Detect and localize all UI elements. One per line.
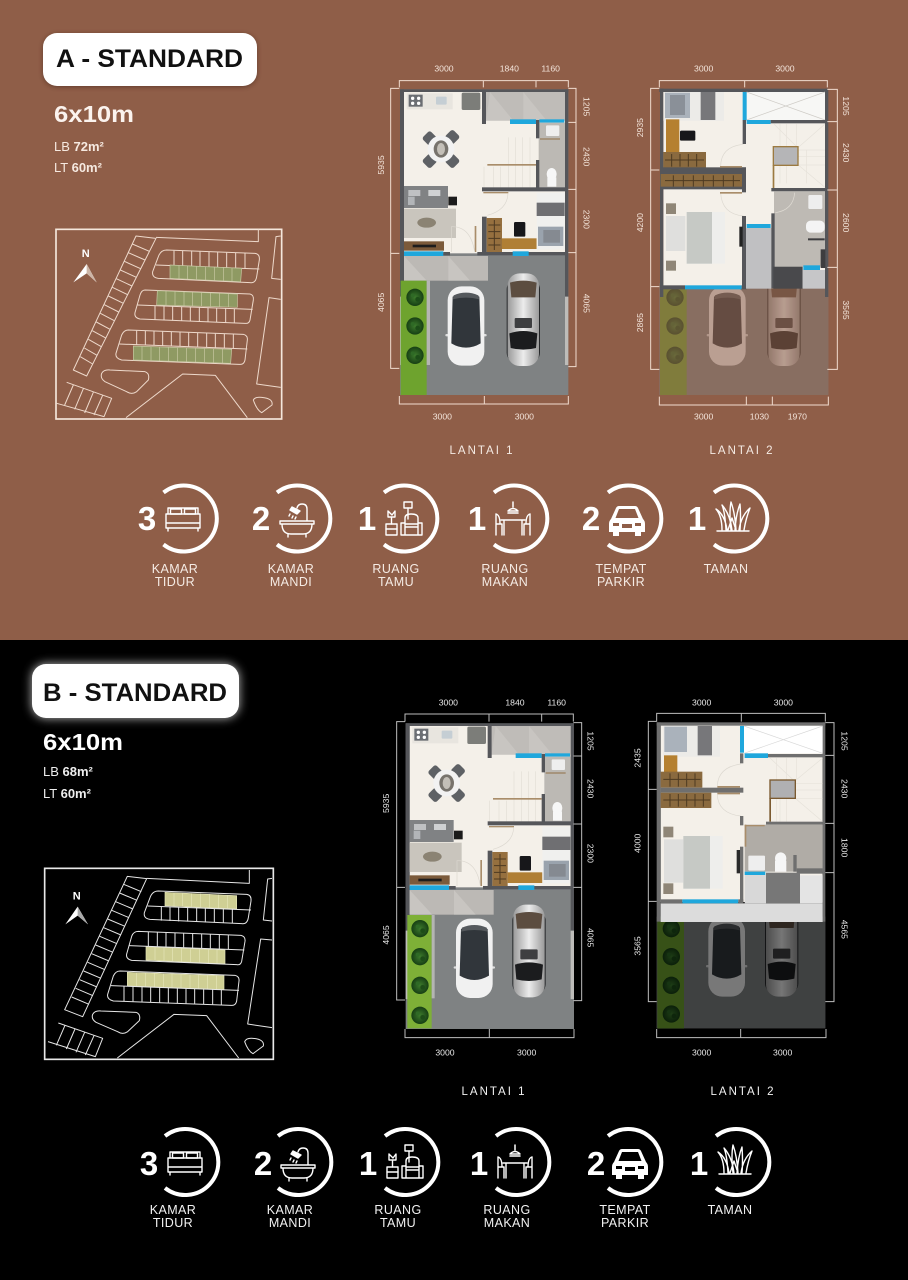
dimensions A2: 3000 — [694, 64, 713, 74]
feature: ruang tamu A: RUANG — [372, 562, 420, 576]
feature: kamar mandi A: MANDI — [270, 575, 312, 589]
feature: ruang makan A — [468, 486, 547, 589]
site plan A — [56, 229, 282, 419]
feature: taman A — [688, 486, 767, 576]
dimensions A2: 1970 — [788, 412, 807, 422]
site plan B — [45, 868, 273, 1059]
dimensions B1: 3000 — [435, 1047, 455, 1057]
dimensions A2: 3565 — [841, 300, 851, 320]
site plan A: N — [82, 248, 90, 260]
dimensions B1: 1840 — [505, 698, 525, 708]
LB text B: LB 68m² — [43, 764, 94, 779]
LT text B: LT 60m² — [43, 786, 92, 801]
dimensions B1: 1160 — [547, 698, 566, 708]
building A2 — [659, 89, 828, 297]
dimensions B1: 3000 — [439, 698, 458, 708]
background: section A — [0, 0, 908, 640]
dimensions A2: 1205 — [841, 96, 851, 116]
dimensions B2: 1800 — [840, 838, 850, 857]
dimensions A2: 4200 — [635, 213, 645, 232]
feature: ruang makan A: 1 — [468, 500, 486, 537]
dimensions A1: 5935 — [376, 155, 386, 175]
caption: lantai 2 A: LANTAI 2 — [710, 445, 774, 457]
dimensions B1: 3000 — [517, 1047, 536, 1057]
heading pill: A - STANDARD: A - STANDARD — [56, 45, 243, 73]
feature: kamar mandi A: KAMAR — [268, 562, 314, 576]
dimensions A1: 4065 — [582, 294, 592, 313]
site plan B: N — [73, 890, 81, 902]
dimensions B2: 1205 — [840, 731, 850, 751]
feature: ruang tamu B: TAMU — [380, 1216, 416, 1230]
feature: kamar mandi A — [252, 486, 330, 589]
size text B: 6x10m — [43, 729, 123, 755]
feature: taman B: 1 — [690, 1145, 708, 1182]
feature: taman A: 1 — [688, 500, 706, 537]
dimensions A1: 2300 — [582, 210, 592, 229]
feature: tempat parkir B — [587, 1129, 661, 1230]
feature: kamar mandi B: KAMAR — [267, 1203, 313, 1217]
dimensions A2: 1030 — [750, 412, 769, 422]
dimensions B2: 2435 — [632, 748, 642, 768]
feature: tempat parkir A — [582, 486, 661, 589]
feature: ruang makan A: RUANG — [481, 562, 529, 576]
feature: taman B — [690, 1129, 769, 1217]
feature: kamar mandi B: 2 — [254, 1145, 272, 1182]
dimensions B1: 2300 — [586, 844, 596, 863]
dimensions B2: 4565 — [840, 920, 850, 939]
feature: kamar tidur A — [138, 486, 217, 589]
dimensions B2: 4000 — [632, 834, 642, 853]
floor plan A lantai 1 — [376, 64, 592, 422]
feature: ruang makan A: MAKAN — [482, 575, 528, 589]
cars B1 — [454, 905, 546, 998]
feature: kamar mandi A: 2 — [252, 500, 270, 537]
floor plan A lantai 2 — [635, 64, 851, 422]
garden B1 — [407, 915, 435, 1028]
dimensions B2 — [632, 698, 850, 1057]
garden A1 — [401, 281, 430, 395]
dimensions A2: 3000 — [775, 64, 795, 74]
feature: tempat parkir B: PARKIR — [601, 1216, 649, 1230]
dimensions A2: 2935 — [635, 118, 645, 137]
feature: ruang makan B: MAKAN — [484, 1216, 530, 1230]
cars A1 — [445, 273, 540, 366]
feature: tempat parkir A: 2 — [582, 500, 600, 537]
feature: kamar mandi B — [254, 1129, 331, 1230]
dimensions A1: 3000 — [434, 64, 454, 74]
dimensions A2: 2865 — [635, 313, 645, 332]
dimensions B2: 3000 — [773, 1047, 792, 1057]
feature: kamar tidur A: 3 — [138, 500, 156, 537]
feature: taman A: TAMAN — [704, 562, 748, 576]
feature: tempat parkir B: TEMPAT — [599, 1203, 651, 1217]
heading pill: B - STANDARD: B - STANDARD — [43, 679, 227, 707]
dimensions B1: 2430 — [586, 779, 596, 798]
feature: tempat parkir A: PARKIR — [597, 575, 645, 589]
LB text A: LB 72m² — [54, 139, 105, 154]
feature: ruang tamu B — [359, 1129, 438, 1230]
feature: ruang tamu B: RUANG — [374, 1203, 422, 1217]
heading pill: A - STANDARD — [43, 33, 257, 87]
caption: lantai 2 B: LANTAI 2 — [710, 1086, 776, 1098]
dimensions A1: 1160 — [541, 64, 560, 74]
dimensions B1: 1205 — [586, 731, 596, 751]
LT text A: LT 60m² — [54, 160, 103, 175]
feature: ruang tamu A — [358, 486, 437, 589]
dimensions A2: 3000 — [694, 412, 713, 422]
dimensions B1: 4065 — [586, 928, 596, 947]
dimensions B2: 3565 — [632, 936, 642, 956]
feature: ruang makan B — [470, 1129, 549, 1230]
feature: ruang tamu A: TAMU — [378, 575, 414, 589]
caption: lantai 1 B: LANTAI 1 — [462, 1086, 526, 1098]
feature: taman B: TAMAN — [708, 1203, 752, 1217]
dimensions A1: 1840 — [500, 64, 519, 74]
feature: kamar mandi B: MANDI — [269, 1216, 311, 1230]
feature: kamar tidur B — [140, 1129, 218, 1230]
dimensions A1: 3000 — [515, 412, 534, 422]
feature: tempat parkir A: TEMPAT — [595, 562, 647, 576]
dimensions A2: 2600 — [841, 213, 851, 232]
dimensions B2: 3000 — [692, 1047, 711, 1057]
feature: ruang makan B: RUANG — [483, 1203, 531, 1217]
dimensions A1 — [376, 64, 592, 422]
feature: kamar tidur A: TIDUR — [155, 575, 195, 589]
feature: kamar tidur B: 3 — [140, 1145, 158, 1182]
dimensions B1 — [381, 698, 596, 1057]
caption: lantai 1 A: LANTAI 1 — [450, 445, 514, 457]
heading pill: B - STANDARD — [32, 664, 239, 718]
building B2 — [657, 722, 825, 922]
dimensions A1: 3000 — [433, 412, 452, 422]
dimensions B1: 5935 — [381, 794, 391, 813]
dimensions B1: 4065 — [381, 925, 391, 945]
dimensions B2: 3000 — [692, 698, 711, 708]
feature: kamar tidur B: KAMAR — [150, 1203, 196, 1217]
feature: tempat parkir B: 2 — [587, 1145, 605, 1182]
floor plan B lantai 2 — [632, 698, 850, 1057]
feature: ruang tamu A: 1 — [358, 500, 376, 537]
dimensions B2: 3000 — [774, 698, 793, 708]
background: section B — [0, 640, 908, 1280]
dimensions A2: 2430 — [841, 143, 851, 162]
driveway below A2 — [659, 273, 828, 395]
dimensions A1: 4065 — [376, 293, 386, 312]
dimensions A1: 1205 — [582, 97, 592, 116]
floor plan B lantai 1 — [381, 698, 596, 1057]
feature: kamar tidur A: KAMAR — [152, 562, 198, 576]
feature: kamar tidur B: TIDUR — [153, 1216, 193, 1230]
feature: ruang makan B: 1 — [470, 1145, 488, 1182]
dimensions A1: 2430 — [582, 147, 592, 166]
dimensions A2 — [635, 64, 851, 422]
size text A: 6x10m — [54, 101, 134, 127]
driveway below B2 — [657, 904, 825, 1028]
dimensions B2: 2430 — [840, 779, 850, 798]
feature: ruang tamu B: 1 — [359, 1145, 377, 1182]
